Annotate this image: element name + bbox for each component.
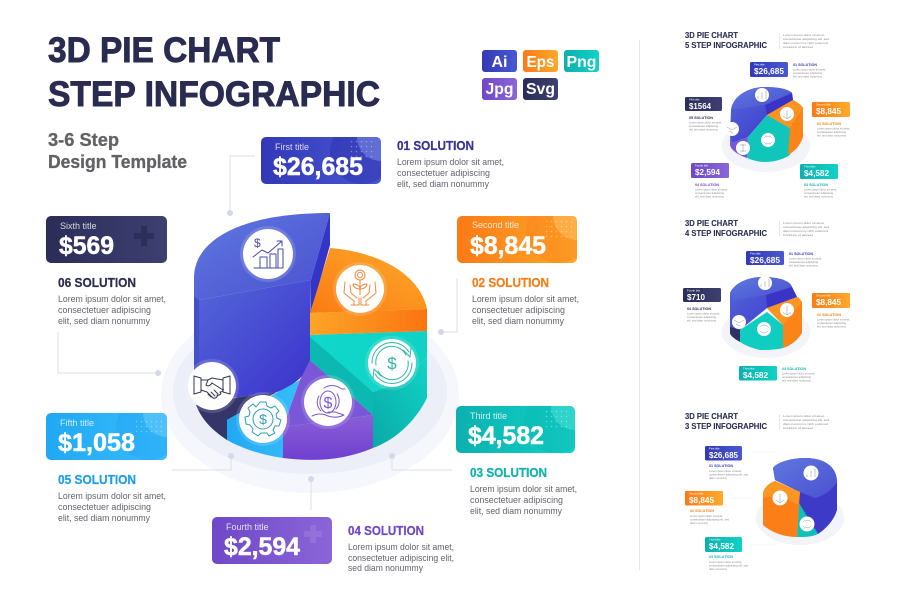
subtitle xyxy=(48,130,187,172)
text: 02 solution: consectetuer adipiscing xyxy=(817,130,846,134)
text: 02 solution xyxy=(690,509,729,525)
pie chart base shadow xyxy=(161,297,459,493)
text: 01 solution: elit, sed diam nonummy xyxy=(789,264,819,268)
main 3D pie chart xyxy=(194,213,427,460)
text: 02 solution: elit, sed diam nonummy xyxy=(472,316,564,327)
text: 03 solution: diam nonummy xyxy=(709,567,728,571)
text: 01 solution: elit, sed diam nonummy xyxy=(397,179,489,190)
panel: 4 step infographic xyxy=(683,219,850,382)
title: STEP INFOGRAPHIC xyxy=(48,75,380,114)
card: $4,582: Third title xyxy=(743,366,755,370)
text: 02 solution: 02 SOLUTION xyxy=(472,275,549,290)
card: fifth title xyxy=(46,413,167,460)
text: 05 solution: elit, sed diam nonummy xyxy=(689,128,719,132)
card: $4,582: $4,582 xyxy=(804,169,830,178)
text: 05 solution: consectetuer adipiscing xyxy=(58,502,151,513)
card: fourth title: Fourth title xyxy=(226,522,269,532)
card: third title: $4,582 xyxy=(468,422,544,450)
heading: Lorem ipsum dolor sit amet, xyxy=(783,221,825,225)
slice: fourth purple xyxy=(283,360,373,460)
icon: hands holding flower xyxy=(333,262,387,316)
card: second title: $8,845 xyxy=(470,232,546,260)
text: 01 solution: consectetuer adipiscing xyxy=(789,260,818,264)
text: 01 solution: diam nonummy xyxy=(709,476,728,480)
card: $26,685 xyxy=(746,251,784,265)
card: $8,845: Second title xyxy=(816,102,831,106)
heading: 3D PIE CHART xyxy=(685,412,738,421)
card: $26,685: First title xyxy=(754,62,765,66)
text: 04 solution: consectetuer adipiscing xyxy=(687,315,716,319)
card: $4,582: $4,582 xyxy=(743,371,769,380)
card: $4,582: Third title xyxy=(709,538,721,542)
card: $2,594: $2,594 xyxy=(695,168,721,177)
panel: 3 step infographic xyxy=(685,412,844,571)
text: 01 solution xyxy=(397,138,504,190)
pie: 4 step xyxy=(722,276,810,358)
card: $1564: $1564 xyxy=(689,102,712,111)
text: 04 solution xyxy=(348,523,454,574)
text: 03 solution: 03 SOLUTION xyxy=(470,465,547,480)
text: 02 solution xyxy=(817,122,850,138)
text: 02 solution: Lorem ipsum dolor sit amet, xyxy=(817,126,850,130)
card: first title: $26,685 xyxy=(273,153,363,181)
card: $26,685 xyxy=(705,446,742,460)
heading: consectetuer adipiscing elit, sed xyxy=(783,37,830,41)
text: 03 solution: 03 SOLUTION xyxy=(804,183,828,187)
subtitle: Design Template xyxy=(48,152,187,172)
heading: 4 STEP INFOGRAPHIC xyxy=(685,229,767,238)
text: 02 solution: elit, sed diam nonummy xyxy=(817,324,847,328)
text: 04 solution: 04 SOLUTION xyxy=(348,523,424,538)
card: $1564 xyxy=(685,97,722,111)
text: 03 solution: Lorem ipsum dolor sit amet, xyxy=(804,188,837,192)
text: 06 solution: consectetuer adipiscing xyxy=(58,305,151,316)
icon: gear dollar: $ xyxy=(259,411,267,427)
heading: consectetuer adipiscing elit, sed xyxy=(783,225,830,229)
text: 02 solution: 02 SOLUTION xyxy=(817,122,841,126)
text: 02 solution: diam nonummy xyxy=(690,521,709,525)
card: sixth title: $569 xyxy=(59,232,114,260)
text: 05 solution xyxy=(689,116,722,132)
text: 01 solution: Lorem ipsum dolor sit amet, xyxy=(709,469,742,473)
text: 02 solution: Lorem ipsum dolor sit amet, xyxy=(690,514,723,518)
card: fourth title: $2,594 xyxy=(224,533,300,561)
text: 03 solution: 03 SOLUTION xyxy=(782,367,806,371)
text: 01 solution: Lorem ipsum dolor sit amet, xyxy=(397,157,504,168)
card: $26,685: $26,685 xyxy=(750,256,781,265)
heading: 3D PIE CHART xyxy=(685,31,738,40)
text: 04 solution xyxy=(687,307,720,322)
leader lines xyxy=(730,452,778,545)
heading xyxy=(685,412,830,431)
card: $2,594 xyxy=(691,163,729,178)
text: 02 solution xyxy=(817,313,850,328)
text: 04 solution: consectetuer adipiscing elit, xyxy=(348,553,454,564)
card: first title: First title xyxy=(275,142,309,152)
text: 01 solution: consectetuer adipiscing xyxy=(397,168,490,179)
text: 05 solution: elit, sed diam nonummy xyxy=(58,513,150,524)
text: 02 solution xyxy=(472,275,579,327)
card: $26,685: First title xyxy=(709,446,720,450)
text: 02 solution: elit, sed diam nonummy xyxy=(817,134,847,138)
text: 03 solution xyxy=(782,367,815,382)
text: 04 solution: sed diam nonummy xyxy=(348,563,423,574)
heading xyxy=(685,219,830,238)
slice: sixth navy xyxy=(196,392,277,440)
card: second title xyxy=(457,216,577,263)
heading: tincidunt ut laoreet xyxy=(783,426,813,430)
card: $4,582 xyxy=(739,366,777,380)
card: $8,845 xyxy=(685,491,723,506)
text: 01 solution xyxy=(789,252,822,268)
card: $1564: Fifth title xyxy=(689,98,700,102)
card: $4,582 xyxy=(800,164,838,179)
card: fourth title xyxy=(212,517,332,564)
title: 3D PIE CHART xyxy=(48,31,280,70)
card: $26,685: $26,685 xyxy=(754,67,785,76)
card: $8,845 xyxy=(812,102,850,117)
subtitle: 3-6 Step xyxy=(48,130,119,150)
card: fifth title: Fifth title xyxy=(60,418,94,428)
heading: diam nonummy nibh euismod xyxy=(783,422,829,426)
card: $26,685 xyxy=(750,62,788,77)
card: second title: Second title xyxy=(472,220,519,230)
text: 05 solution: Lorem ipsum dolor sit amet, xyxy=(58,491,166,502)
text: 01 solution xyxy=(709,464,748,480)
text: 03 solution: consectetuer adipiscing xyxy=(782,375,811,379)
card: $8,845: $8,845 xyxy=(816,298,842,307)
text: 03 solution: 03 SOLUTION xyxy=(709,555,733,559)
file format badges: Png xyxy=(566,54,596,71)
card: $26,685: First title xyxy=(750,252,761,256)
file format badges: Svg xyxy=(526,81,555,98)
text: 03 solution: Lorem ipsum dolor sit amet, xyxy=(470,484,577,495)
card: fifth title: $1,058 xyxy=(58,429,135,457)
heading: diam nonummy nibh euismod xyxy=(783,41,829,45)
text: 03 solution: Lorem ipsum dolor sit amet, xyxy=(709,560,742,564)
icon: growth chart xyxy=(240,226,296,282)
heading: Lorem ipsum dolor sit amet, xyxy=(783,33,825,37)
file format badges: Eps xyxy=(526,54,555,71)
icon: hands with coin xyxy=(301,375,355,429)
heading xyxy=(685,31,830,50)
leader lines xyxy=(58,156,457,510)
text: 03 solution: Lorem ipsum dolor sit amet, xyxy=(782,372,815,376)
icon: gear dollar xyxy=(236,392,290,446)
card: sixth title xyxy=(46,216,167,263)
text: 02 solution: consectetuer adipiscing xyxy=(472,305,565,316)
heading: 3D PIE CHART xyxy=(685,219,738,228)
text: 02 solution: consectetuer adipiscing xyxy=(817,321,846,325)
text: 04 solution: elit, sed diam nonummy xyxy=(687,318,717,322)
panel: 5 step infographic xyxy=(685,31,850,198)
heading: 3 STEP INFOGRAPHIC xyxy=(685,422,767,431)
file format badges: Jpg xyxy=(486,81,514,98)
card: $8,845 xyxy=(812,293,850,308)
card: $710: $710 xyxy=(687,293,706,302)
text: 02 solution: Lorem ipsum dolor sit amet, xyxy=(817,318,850,322)
text: 01 solution: 01 SOLUTION xyxy=(397,138,474,153)
card: $26,685: $26,685 xyxy=(709,451,739,460)
text: 03 solution: elit, sed diam nonummy xyxy=(804,194,834,198)
text: 04 solution: elit, sed diam nonummy xyxy=(695,194,725,198)
card: $8,845: Second title xyxy=(816,294,831,298)
card: $4,582 xyxy=(705,537,742,552)
heading: Lorem ipsum dolor sit amet, xyxy=(783,414,825,418)
text: 04 solution: Lorem ipsum dolor sit amet, xyxy=(695,188,728,192)
text: 01 solution: 01 SOLUTION xyxy=(789,252,813,256)
icon: handshake xyxy=(185,359,239,413)
heading: 5 STEP INFOGRAPHIC xyxy=(685,41,767,50)
card: first title xyxy=(261,137,381,184)
text: 03 solution: consectetuer adipiscing elit, sed xyxy=(709,564,748,568)
card: $4,582: Third title xyxy=(804,164,816,168)
text: 02 solution: 02 SOLUTION xyxy=(690,509,714,513)
text: 01 solution: Lorem ipsum dolor sit amet, xyxy=(789,256,822,260)
text: 06 solution: Lorem ipsum dolor sit amet, xyxy=(58,294,166,305)
card: $4,582: $4,582 xyxy=(709,542,735,551)
icon: dollar cycle: $ xyxy=(387,354,397,373)
text: 05 solution xyxy=(58,472,166,524)
slice: third teal xyxy=(310,331,427,448)
text: 03 solution xyxy=(804,183,837,198)
card: $2,594: Fourth title xyxy=(695,164,709,168)
text: 04 solution: Lorem ipsum dolor sit amet, xyxy=(687,312,720,316)
text: 06 solution: elit, sed diam nonummy xyxy=(58,316,150,327)
text: 06 solution: 06 SOLUTION xyxy=(58,275,136,290)
text: 05 solution: Lorem ipsum dolor sit amet, xyxy=(689,120,722,124)
card: third title: Third title xyxy=(470,411,507,421)
text: 02 solution: consectetuer adipiscing elit, sed xyxy=(690,518,729,522)
divider xyxy=(639,40,640,570)
card: $8,845: $8,845 xyxy=(689,496,715,505)
text: 03 solution: consectetuer adipiscing xyxy=(804,191,833,195)
card: sixth title: Sixth title xyxy=(60,221,97,231)
card: $710 xyxy=(683,288,721,302)
card: $710: Fourth title xyxy=(687,288,701,292)
slice: second orange xyxy=(310,248,427,335)
text: 01 solution: consectetuer adipiscing xyxy=(793,71,822,75)
pie: 5 step xyxy=(722,87,810,172)
text: 05 solution: 05 SOLUTION xyxy=(58,472,136,487)
icon: hands with coin: $ xyxy=(324,395,333,412)
heading: consectetuer adipiscing elit, sed xyxy=(783,418,830,422)
text: 01 solution: 01 SOLUTION xyxy=(709,464,733,468)
text: 01 solution: 01 SOLUTION xyxy=(793,63,817,67)
text: 04 solution: consectetuer adipiscing xyxy=(695,191,724,195)
heading: tincidunt ut laoreet xyxy=(783,233,813,237)
text: 03 solution xyxy=(470,465,577,517)
text: 01 solution xyxy=(793,63,826,78)
text: 02 solution: 02 SOLUTION xyxy=(817,313,841,317)
pie: 3 step xyxy=(756,458,844,545)
text: 04 solution: 04 SOLUTION xyxy=(687,307,711,311)
slice: first blue xyxy=(194,213,330,403)
heading: tincidunt ut laoreet xyxy=(783,45,813,49)
text: 05 solution: consectetuer adipiscing xyxy=(689,124,718,128)
text: 04 solution: Lorem ipsum dolor sit amet, xyxy=(348,542,454,553)
card: third title xyxy=(456,406,575,453)
icon: dollar cycle xyxy=(365,336,419,390)
text: 03 solution: elit, sed diam nonummy xyxy=(470,506,562,517)
icon: growth chart: $ xyxy=(254,236,261,250)
text: 01 solution: elit, sed diam nonummy xyxy=(793,74,823,78)
slice: fifth sky blue xyxy=(227,380,300,458)
text: 06 solution xyxy=(58,275,166,327)
text: 02 solution: Lorem ipsum dolor sit amet, xyxy=(472,294,579,305)
file format badges xyxy=(482,50,599,100)
text: 01 solution: Lorem ipsum dolor sit amet, xyxy=(793,68,826,72)
heading: diam nonummy nibh euismod xyxy=(783,229,829,233)
text: 03 solution: consectetuer adipiscing xyxy=(470,495,563,506)
file format badges: Ai xyxy=(492,54,508,71)
text: 04 solution xyxy=(695,183,728,198)
card: $8,845: $8,845 xyxy=(816,107,842,116)
text: 04 solution: 04 SOLUTION xyxy=(695,183,719,187)
text: 05 solution: 05 SOLUTION xyxy=(689,116,713,120)
text: 03 solution: elit, sed diam nonummy xyxy=(782,378,812,382)
text: 03 solution xyxy=(709,555,748,571)
title xyxy=(48,31,380,114)
text: 01 solution: consectetuer adipiscing elit, sed xyxy=(709,472,748,476)
card: $8,845: Second title xyxy=(689,492,704,496)
